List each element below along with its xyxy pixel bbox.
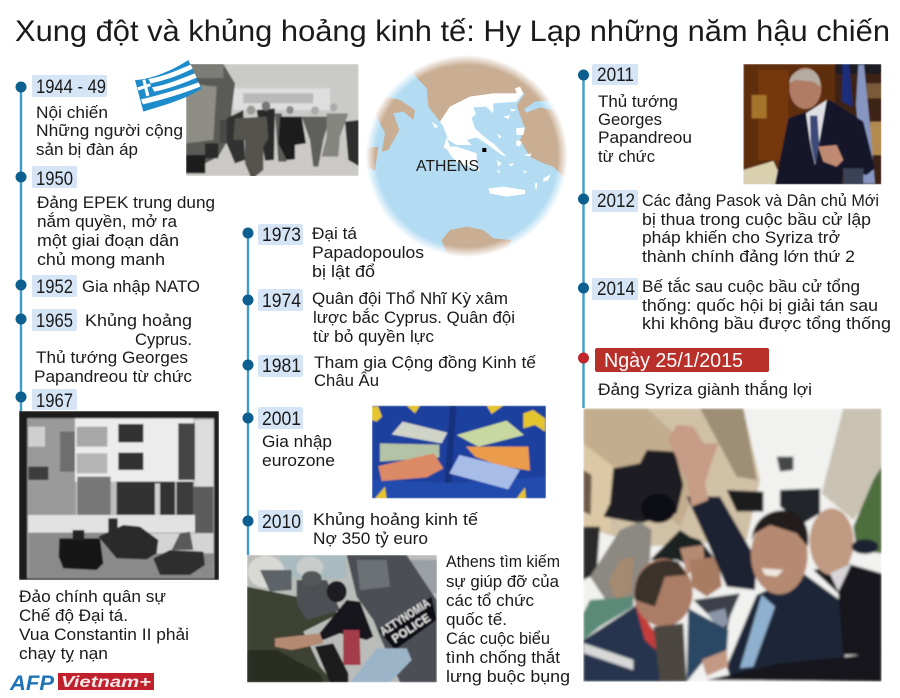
event: 25/1/2015 banner [595,348,812,399]
event: 1974: lược bắc Cyprus. Quân đội [313,308,515,327]
land: Italy [366,96,415,170]
event: 1981: Tham gia Cộng đồng Kinh tế [314,353,537,372]
event: 2001: Gia nhập [262,432,332,451]
event: 2014 [592,277,891,333]
event: 1944 - 49: Những người cộng [36,121,183,140]
photo: Tsipras waving in crowd [583,408,882,682]
photo: euro banknotes on EU flag [372,406,546,498]
land: Libya [442,226,512,256]
event: 1973: 1973 [262,225,301,246]
photo: civil war prisoners [186,64,359,179]
event: 2014: thống: quốc hội bị giải tán sau [642,296,878,315]
event: 2001 [258,407,335,470]
marker: Athens [482,148,486,152]
event: 1944 - 49 [32,75,183,159]
text: 2010 Athens seeks aid: sự giúp đỡ của [446,572,560,591]
event: 25/1/2015 banner: Đảng Syriza giành thắng lợi [598,380,812,399]
text: 1967 coup description: chạy tỵ nạn [19,644,108,663]
text: 1967 coup description: Chế độ Đại tá. [19,606,128,625]
event: 2014: Bế tắc sau cuộc bầu cử tổng [642,277,860,296]
event: 2011: từ chức [598,147,655,166]
map label: Athens: ATHENS [416,158,479,175]
event: 2012: thành chính đảng lớn thứ 2 [642,247,855,266]
event: 1950: một giai đoạn dân [37,231,179,250]
sea: Marmara [524,100,554,113]
text: 1967 coup description [19,587,189,663]
event: 1950 [32,166,215,269]
event: 2012: bị thua trong cuộc bầu cử lập [642,210,871,229]
event: 2011 [592,64,692,166]
right timeline [578,70,589,408]
event: 1973: Papadopoulos [312,243,424,262]
event: 1974: Quân đội Thổ Nhĩ Kỳ xâm [312,289,508,308]
photo: 1967 tanks in Athens [19,411,219,580]
event: 2014: 2014 [597,279,635,300]
event: 1965: Khủng hoảng [85,311,192,330]
event: 1944 - 49: Nội chiến [36,103,108,122]
land: Balkans and Turkey [412,56,567,178]
event: 1981 [258,353,537,390]
event: 1965: 1965 [36,311,73,332]
text: 2010 Athens seeks aid: lưng buộc bụng [446,667,570,686]
event: 25/1/2015 banner: Ngày 25/1/2015 [604,350,743,372]
event: 1973: Đại tá [312,224,358,243]
event: 1950: 1950 [36,169,73,190]
photo: Georges Papandreou [743,64,881,184]
text: 2010 Athens seeks aid: Athens tìm kiếm [446,552,560,571]
event: 1952: 1952 [36,277,73,298]
event: 2010: 2010 [262,512,301,533]
event: 2012: Các đảng Pasok và Dân chủ Mới [642,191,879,210]
logo: AFP Vietnam+: Vietnam+ [61,674,151,691]
event: 1950: chủ mong manh [37,250,165,269]
text: 2010 Athens seeks aid: Các cuộc biểu [446,629,550,648]
event: 1974: từ bỏ quyền lực [313,327,434,346]
event: 2012 [592,190,879,266]
text: 2010 Athens seeks aid: các tổ chức [446,591,534,610]
event: 1950: Đảng EPEK trung dung [37,193,215,212]
event: 1944 - 49: sản bị đàn áp [36,140,138,159]
event: 2012: pháp khiến cho Syriza trở [642,228,840,247]
middle timeline [242,228,254,555]
map: Greece and Aegean [366,56,567,256]
logo: AFP Vietnam+: AFP [9,672,55,695]
photo: riot police clash: POLICE [389,610,433,646]
event: 1965: Thủ tướng Georges [36,348,188,367]
icon: Greek flag [135,60,202,112]
photo: riot police clash [247,555,437,682]
event: 2010: Nợ 350 tỷ euro [313,529,428,548]
title: Xung đột và khủng hoảng kinh tế: Hy Lạp những năm hậu chiến [15,15,890,48]
photo: riot police clash: ΑΣΤΥΝΟΜΙΑ [377,596,433,639]
text: 1967 coup description: Vua Constantin II phải [19,625,189,644]
logo: AFP Vietnam+ [9,672,154,695]
event: 1952 [32,275,200,298]
event: 1965 [32,309,192,386]
event: 2014: khi không bầu được tổng thống [642,314,891,333]
event: 1973: bị lật đổ [312,262,375,281]
event: 2001: 2001 [262,409,301,430]
event: 2010 [258,510,479,548]
event: 1952: Gia nhập NATO [82,277,200,296]
event: 2011: Thủ tướng [598,92,678,111]
land: Greece mainland and islands [432,87,551,197]
event: 2001: eurozone [262,451,335,470]
text: 2010 Athens seeks aid: tình chống thắt [446,648,560,667]
event: 1967: 1967 [36,391,73,412]
text: 1967 coup description: Đảo chính quân sự [19,587,166,606]
event: 2011: Papandreou [598,128,692,147]
event: 1944 - 49: 1944 - 49 [36,77,106,98]
event: 1973 [258,224,424,281]
event: 2012: 2012 [597,191,635,212]
event: 1974: 1974 [262,291,301,312]
left timeline [16,82,26,412]
event: 1981: Châu Âu [314,371,379,390]
event: 1965: Papandreou từ chức [34,367,192,386]
event: 2011: 2011 [597,65,634,86]
event: 2011: Georges [598,110,662,129]
text: 2010 Athens seeks aid: quốc tế. [446,610,507,629]
event: 1965: Cyprus. [135,330,192,349]
text: 2010 Athens seeks aid [446,552,570,686]
event: 1974 [258,289,515,346]
event: 1981: 1981 [262,356,301,377]
event: 2010: Khủng hoảng kinh tế [313,510,479,529]
event: 1950: nắm quyền, mở ra [37,212,178,231]
